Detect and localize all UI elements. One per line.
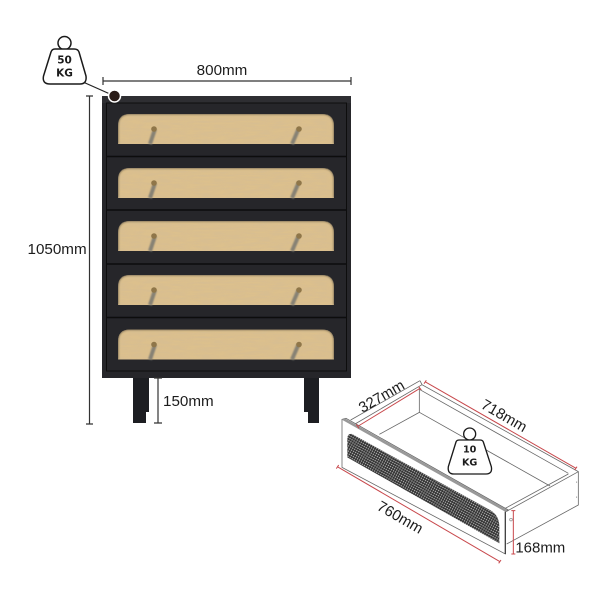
drawer 5 bbox=[117, 328, 335, 360]
drawer walls and floor bbox=[351, 381, 578, 544]
drawer detail diagram bbox=[336, 377, 578, 563]
icon: 50 KG weight with leader bbox=[43, 36, 121, 102]
icon: 10 KG weight: 10 bbox=[463, 444, 477, 455]
dimension: width 800mm bbox=[103, 62, 351, 85]
dimension: 327mm: 327mm bbox=[356, 377, 408, 417]
icon: 10 KG weight bbox=[448, 428, 492, 474]
drawer 1 bbox=[117, 113, 335, 144]
red measure lines bbox=[336, 380, 577, 563]
icon: 10 KG weight: KG bbox=[462, 458, 477, 469]
dimension: height 1050mm: 1050mm bbox=[28, 241, 87, 258]
dimension: leg height 150mm bbox=[154, 378, 214, 423]
drawer 2 bbox=[117, 167, 335, 198]
icon: 50 KG weight with leader: KG bbox=[56, 68, 73, 80]
drawer 3 bbox=[117, 220, 335, 251]
dimension: 760mm: 760mm bbox=[374, 498, 426, 538]
dimension: width 800mm: 800mm bbox=[197, 62, 247, 79]
cabinet legs bbox=[133, 376, 319, 423]
dimension: height 1050mm bbox=[28, 96, 93, 424]
drawer front panel bbox=[342, 418, 512, 554]
dimension: 718mm: 718mm bbox=[478, 396, 530, 436]
dimension: 168mm: 168mm bbox=[515, 540, 565, 557]
drawer 4 bbox=[117, 274, 335, 305]
cabinet body bbox=[102, 96, 351, 378]
dimension: leg height 150mm: 150mm bbox=[163, 393, 214, 410]
icon: 50 KG weight with leader: 50 bbox=[57, 54, 72, 66]
